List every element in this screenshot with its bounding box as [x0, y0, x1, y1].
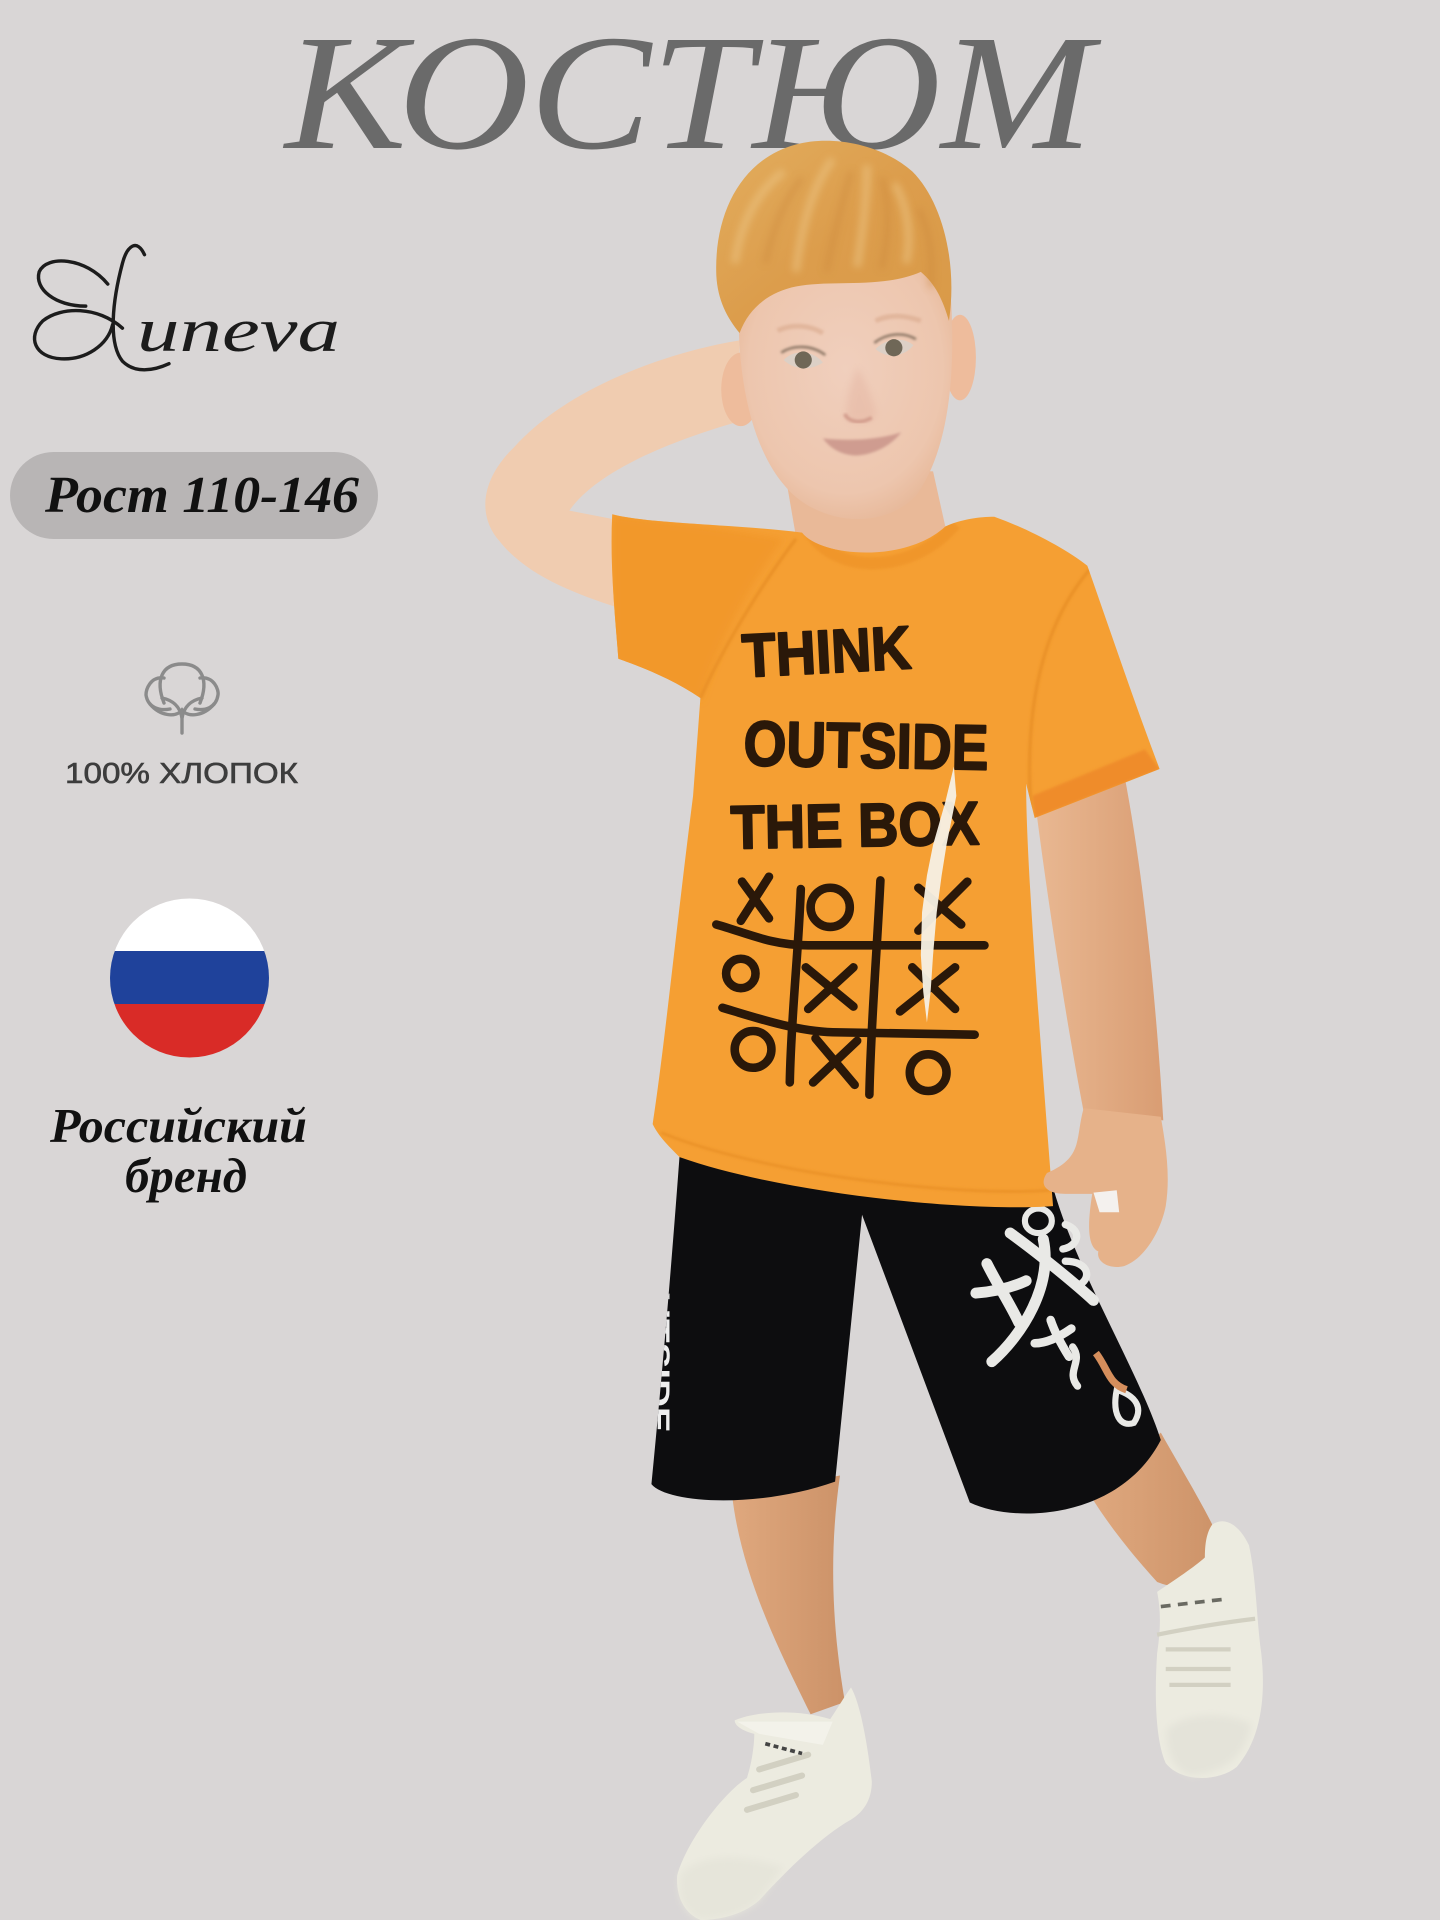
shorts	[642, 1139, 1161, 1514]
mouth	[823, 432, 901, 456]
title: КОСТЮМ	[283, 1, 1102, 184]
shirt slogan	[730, 613, 989, 862]
icon: cotton boll	[146, 664, 218, 733]
face	[739, 246, 952, 519]
height pill badge: Рост 110-146	[44, 467, 359, 524]
back leg	[1091, 1433, 1231, 1602]
shirt slogan: THE BOX	[730, 789, 980, 862]
leg print: tic-tac-toe	[976, 1209, 1138, 1424]
text: Russian brand	[49, 1098, 307, 1203]
eyes	[778, 316, 921, 369]
logo: Luneva	[35, 246, 340, 370]
nose	[845, 414, 872, 422]
chalk scratch	[921, 767, 956, 1022]
photo: boy in orange t-shirt and black shorts	[485, 141, 1263, 1920]
shirt slogan: OUTSIDE	[743, 708, 989, 784]
shirt slogan: THINK	[740, 613, 913, 690]
right sneaker	[1156, 1521, 1263, 1778]
text: Russian brand: бренд	[125, 1148, 247, 1203]
shirt shading	[612, 514, 1160, 1192]
raised arm	[485, 340, 740, 607]
logo: Luneva: uneva	[137, 297, 340, 365]
tic-tac-toe grid	[716, 877, 984, 1095]
side print: OUTSIDE	[642, 1261, 675, 1433]
hand	[1044, 1108, 1168, 1267]
front leg	[732, 1476, 845, 1714]
neck	[784, 465, 945, 556]
ears	[721, 315, 976, 426]
right arm	[1036, 774, 1163, 1120]
text: Russian brand: Российский	[49, 1098, 307, 1153]
front sneaker	[677, 1687, 872, 1920]
label: 100% cotton: 100% ХЛОПОК	[65, 758, 298, 790]
hair	[716, 141, 951, 333]
t-shirt	[612, 514, 1160, 1207]
icon: Russian flag circle	[110, 898, 270, 1058]
height pill badge	[10, 452, 378, 539]
